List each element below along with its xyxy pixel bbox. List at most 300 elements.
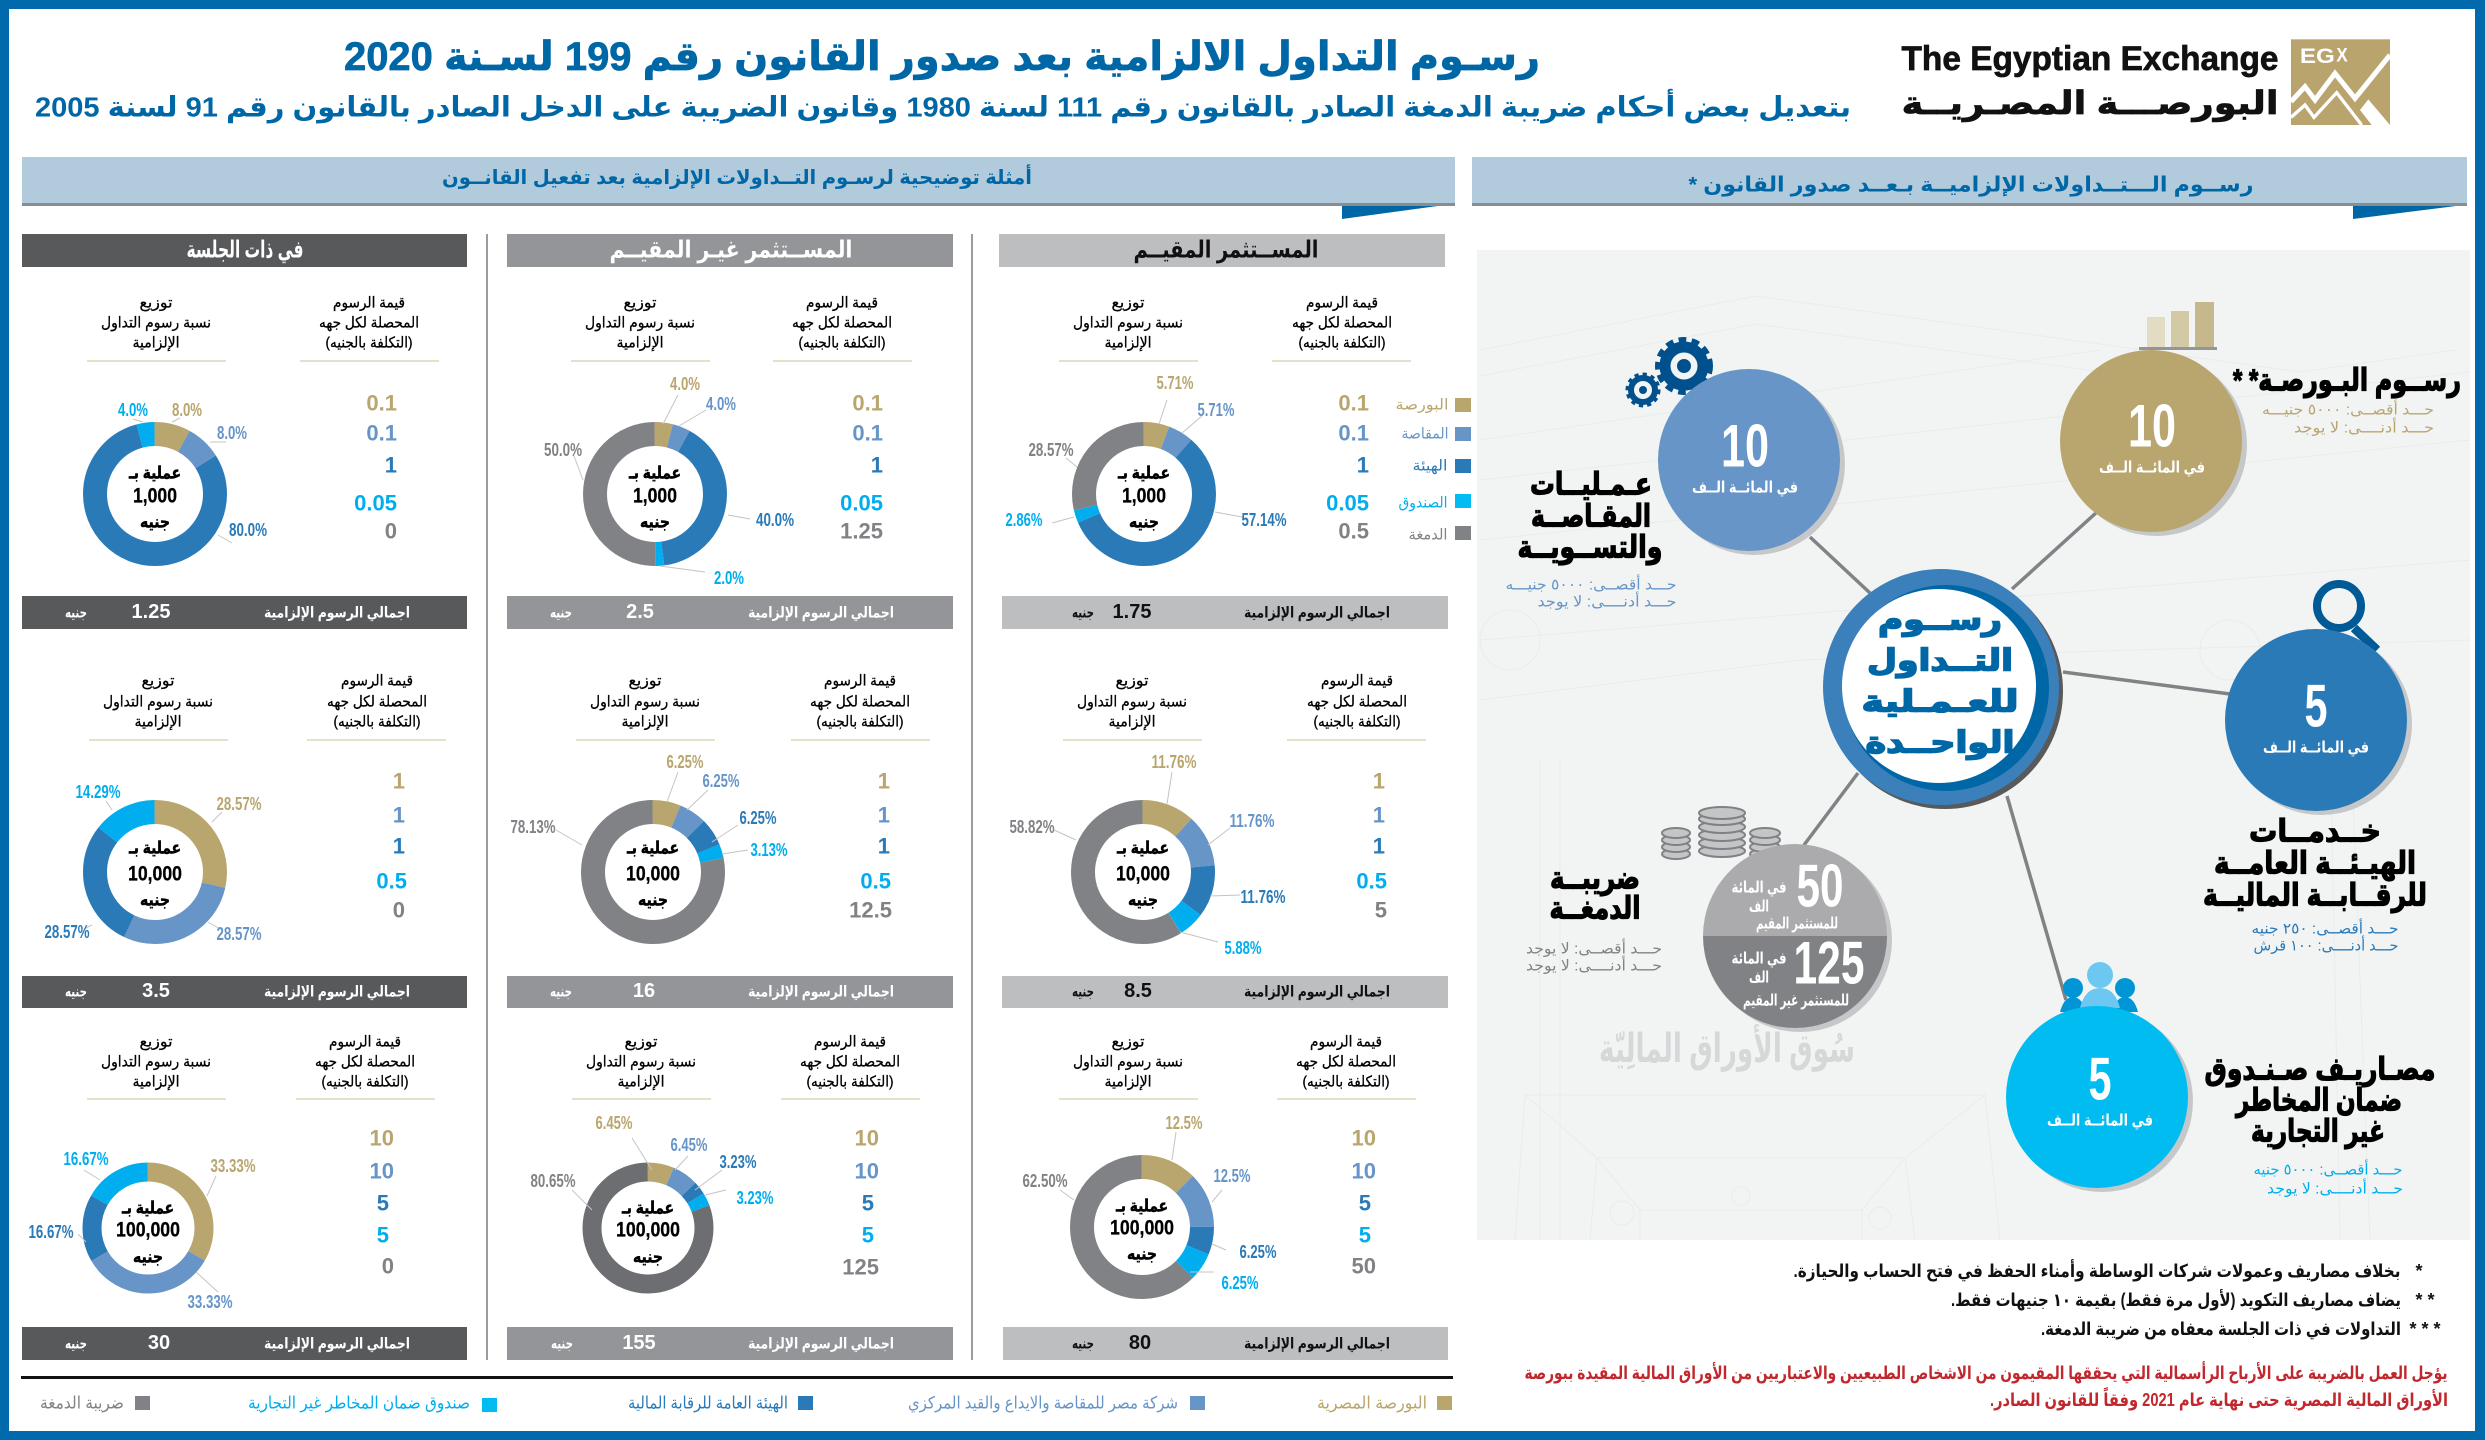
column headers: توزيع [1116, 672, 1148, 690]
donut chart: 2.0% [714, 568, 744, 588]
donut chart: 28.57% [1028, 440, 1074, 460]
total bar: 8.5 [1124, 980, 1152, 1002]
donut chart: 33.33% [210, 1156, 256, 1176]
donut chart: 6.25% [666, 752, 704, 772]
panel: resident 10,000 [1002, 672, 1448, 1008]
values: 10 [1352, 1126, 1376, 1150]
total bar [507, 596, 953, 629]
values: 5 [377, 1222, 389, 1248]
column headers: قيمة الرسوم [814, 1034, 886, 1050]
values: 1.25 [840, 518, 883, 544]
donut chart: 5.71% [1156, 373, 1194, 393]
logo: The Egyptian Exchange: X [2336, 45, 2348, 66]
donut chart: عملية بـ [626, 838, 679, 858]
donut chart: جنيه [133, 1248, 163, 1266]
total bar: اجمالي الرسوم الإلزامية [264, 604, 410, 622]
donut chart: عملية بـ [1116, 838, 1169, 858]
donut chart: عملية بـ [121, 1198, 174, 1218]
values: 1 [878, 834, 890, 858]
values: 1 [1373, 802, 1385, 828]
donut chart [28, 1149, 256, 1312]
column headers: قيمة الرسوم [1306, 294, 1378, 312]
bottom legend: صندوق ضمان المخاطر غير التجارية [248, 1394, 470, 1412]
column headers: (التكلفة بالجنيه) [326, 334, 412, 352]
column headers: الإلزامية [616, 334, 664, 352]
total bar [22, 976, 467, 1008]
circle: exchange fees [2060, 350, 2247, 536]
icon: people [2060, 962, 2138, 1012]
total bar: 16 [633, 980, 655, 1002]
donut chart [544, 374, 794, 588]
section header: examples: أمثلة توضيحية لرسـوم التــداولات الإلزامية بعد تفعيل القانــون [442, 163, 1032, 189]
total bar: جنيه [551, 1336, 573, 1352]
column headers: توزيع [624, 1034, 658, 1050]
panel: resident 100,000 [1003, 1034, 1448, 1360]
circle: risk fund: في المائــة الــف [2047, 1112, 2153, 1130]
footnotes: التداولات في ذات الجلسة معفاه من ضريبة الدمغة. [2041, 1319, 2401, 1340]
circle: clearing [1658, 369, 1845, 555]
column headers: الإلزامية [618, 1074, 664, 1090]
column headers: المحصلة لكل جهه [1296, 1054, 1396, 1070]
donut chart: 11.76% [1152, 752, 1196, 772]
donut chart [1006, 373, 1286, 554]
donut chart: 6.25% [740, 808, 776, 828]
column headers: قيمة الرسوم [333, 294, 405, 312]
donut chart: 12.5% [1166, 1113, 1202, 1133]
legend: fee bodies: المقاصة [1402, 426, 1448, 442]
hub: trading fees per transaction: للعـمـلية [1862, 686, 2018, 718]
circle: stamp duty [1703, 844, 1892, 1032]
column headers: قيمة الرسوم [1310, 1034, 1382, 1050]
legend: fee bodies: الصندوق [1398, 494, 1448, 512]
column headers: توزيع [624, 294, 656, 312]
values: 10 [855, 1126, 879, 1150]
values: 5 [1359, 1190, 1371, 1216]
donut chart: 62.50% [1022, 1171, 1068, 1191]
column headers [572, 1034, 920, 1099]
column headers: (التكلفة بالجنيه) [816, 714, 904, 730]
label: FRA services: حـــد أدنــــى: ١٠٠ قرش [2254, 936, 2398, 954]
panel: fee structure background [1477, 250, 2470, 1240]
donut chart: 16.67% [64, 1149, 108, 1169]
footnotes: * * * [2409, 1319, 2441, 1339]
donut chart [95, 400, 267, 554]
panel: resident column heading: المســتثمر المقيــم [1134, 236, 1318, 264]
label: clearing and settlement: عـمـليــات [1530, 466, 1652, 502]
panel: non-resident 100,000 [507, 1034, 953, 1360]
column headers: المحصلة لكل جهه [1292, 314, 1392, 332]
donut chart: 28.57% [216, 924, 262, 944]
column headers: نسبة رسوم التداول [1073, 1054, 1183, 1070]
column headers: الإلزامية [132, 1074, 180, 1090]
circle: clearing: في المائــة الــف [1692, 480, 1798, 498]
donut chart: عملية بـ [128, 838, 181, 858]
column headers: (التكلفة بالجنيه) [1298, 334, 1386, 352]
label: risk guarantee fund: ضمان المخاطر [2235, 1082, 2402, 1118]
values [840, 390, 883, 544]
panel: non-resident 10,000 [507, 672, 953, 1008]
donut chart: 3.13% [750, 840, 788, 860]
values: 1 [1373, 768, 1385, 794]
label: stamp duty: حـــد أقصــى: لا يوجد [1526, 938, 1662, 958]
column headers [1059, 294, 1411, 361]
values [370, 1126, 394, 1278]
donut chart: جنيه [140, 890, 170, 910]
panel: resident column heading [999, 234, 1445, 267]
donut chart: 1,000 [633, 484, 677, 508]
values: 50 [1352, 1254, 1376, 1278]
column headers: نسبة رسوم التداول [1073, 314, 1183, 332]
total bar: 1.75 [1113, 601, 1151, 623]
column headers: نسبة رسوم التداول [585, 314, 695, 332]
donut chart: جنيه [1128, 890, 1158, 910]
circle: stamp duty: 125 [1794, 930, 1864, 996]
panel: same-session column heading: في ذات الجلسة [186, 236, 304, 264]
label: exchange fees [2233, 362, 2461, 436]
connector lines [1804, 512, 2230, 1000]
values: 10 [370, 1126, 394, 1150]
logo: The Egyptian Exchange: EG [2300, 44, 2335, 68]
column headers: الإلزامية [1104, 334, 1152, 352]
donut chart [1022, 1113, 1276, 1293]
column headers: نسبة رسوم التداول [590, 694, 700, 710]
hub: trading fees per transaction: رســوم [1878, 604, 2002, 638]
values: 0.1 [366, 420, 397, 446]
bottom legend: البورصة المصرية [1317, 1394, 1427, 1412]
donut chart: 100,000 [1110, 1216, 1174, 1240]
donut chart: 6.25% [702, 771, 740, 791]
donut chart: 4.0% [118, 400, 148, 420]
legend: fee bodies: الدمغة [1408, 526, 1448, 544]
column headers: نسبة رسوم التداول [101, 314, 211, 332]
values: 5 [862, 1222, 874, 1248]
donut chart: 4.0% [706, 394, 736, 414]
label: exchange fees: حـــد أدنــــى: لا يوجد [2294, 418, 2434, 436]
donut chart: 1,000 [133, 484, 177, 508]
bottom legend [40, 1394, 1452, 1414]
column headers: نسبة رسوم التداول [103, 694, 213, 710]
label: stamp duty: حـــد أدنــــى: لا يوجد [1526, 956, 1662, 974]
label: clearing and settlement [1506, 466, 1676, 610]
values: 0 [393, 898, 405, 922]
circle: stamp duty: الف [1749, 970, 1769, 986]
column headers: توزيع [140, 294, 172, 312]
donut chart: 16.67% [28, 1222, 74, 1242]
total bar: 2.5 [626, 601, 654, 623]
total bar: جنيه [550, 604, 572, 622]
circle: FRA services [2225, 629, 2412, 815]
circle: stamp duty: 50 [1796, 852, 1844, 920]
values: 5 [377, 1190, 389, 1216]
column headers [87, 1034, 435, 1099]
values: 0.1 [366, 390, 397, 416]
values: 1 [871, 452, 883, 478]
values [849, 768, 892, 922]
label: exchange fees: حـــد أقصــى: ٥٠٠٠ جنيـــه [2262, 400, 2434, 418]
section header: fees [1472, 157, 2467, 219]
total bar [22, 1327, 467, 1360]
circle: stamp duty: للمستثمر غير المقيم [1743, 992, 1849, 1010]
total bar: اجمالي الرسوم الإلزامية [1244, 1336, 1390, 1352]
icon: coins [1662, 807, 1780, 859]
donut chart: 28.57% [216, 794, 262, 814]
values: 1 [393, 802, 405, 828]
donut chart: عملية بـ [128, 464, 181, 482]
donut chart: 28.57% [44, 922, 90, 942]
donut chart: عملية بـ [1117, 464, 1170, 482]
values: 0.1 [1338, 390, 1369, 416]
values: 1 [878, 802, 890, 828]
column headers: المحصلة لكل جهه [810, 694, 910, 710]
panel: same-session column heading [22, 234, 467, 267]
label: stamp duty: الدمغــة [1550, 890, 1640, 926]
circle: exchange fees: 10 [2128, 392, 2176, 460]
column headers [1059, 1034, 1416, 1099]
bottom legend: شركة مصر للمقاصة والايداع والقيد المركزي [908, 1394, 1178, 1414]
footnotes [1794, 1259, 2441, 1340]
column headers [89, 672, 446, 740]
column headers [571, 294, 912, 361]
total bar [1003, 1327, 1448, 1360]
values [354, 390, 397, 544]
circle: stamp duty: في المائة [1732, 880, 1786, 898]
donut chart: عملية بـ [621, 1198, 674, 1218]
label: stamp duty [1526, 860, 1662, 974]
total bar: جنيه [1072, 604, 1094, 622]
values: 1 [1373, 834, 1385, 858]
legend: fee bodies: البورصة [1396, 396, 1448, 414]
total bar: 80 [1129, 1332, 1151, 1354]
values: 10 [370, 1158, 394, 1184]
subtitle: بتعديل بعض أحكام ضريبة الدمغة الصادر بالقانون رقم 111 لسنة 1980 وقانون الضريبة على الدخل الصادر بالقانون رقم 91 لسنة 2005 [35, 88, 1851, 124]
donut chart: 3.23% [720, 1152, 756, 1172]
label: clearing and settlement: حـــد أدنــــى: لا يوجد [1538, 592, 1676, 610]
donut chart: 6.45% [670, 1135, 708, 1155]
circle: stamp duty: الف [1749, 898, 1769, 916]
panel: same session 10,000 [22, 672, 467, 1008]
column headers: (التكلفة بالجنيه) [334, 714, 420, 730]
footnotes: يضاف مصاريف التكويد (لأول مرة فقط) بقيمة ١٠ جنيهات فقط. [1951, 1289, 2401, 1311]
donut chart: 80.65% [530, 1171, 576, 1191]
donut chart: 6.25% [1240, 1242, 1276, 1262]
column headers: المحصلة لكل جهه [800, 1054, 900, 1070]
donut chart: 80.0% [229, 520, 267, 540]
donut chart: 50.0% [544, 440, 582, 460]
donut chart: 14.29% [76, 782, 120, 802]
donut chart: 8.0% [217, 423, 247, 443]
panel: same session 1,000 [22, 294, 467, 629]
donut chart: عملية بـ [628, 464, 681, 482]
total bar: اجمالي الرسوم الإلزامية [264, 984, 410, 1000]
values: 0.1 [1338, 420, 1369, 446]
values: 0.5 [376, 868, 407, 894]
section header: examples [22, 157, 1455, 219]
column headers: توزيع [140, 1034, 172, 1050]
donut chart: جنيه [638, 890, 668, 910]
total bar: 3.5 [142, 980, 170, 1002]
donut chart [44, 782, 262, 944]
donut chart: 10,000 [128, 862, 182, 886]
column headers: توزيع [142, 672, 174, 690]
values: 0.5 [860, 868, 891, 894]
column headers: المحصلة لكل جهه [327, 694, 427, 710]
column headers: نسبة رسوم التداول [101, 1054, 211, 1070]
total bar [1002, 596, 1448, 629]
values: 0.5 [1356, 868, 1387, 894]
donut chart: 1,000 [1122, 484, 1166, 508]
logo: The Egyptian Exchange: The Egyptian Exchange [1902, 40, 2278, 78]
circle: risk fund [2006, 1006, 2193, 1192]
values: 0.05 [1326, 490, 1369, 516]
donut chart [1010, 752, 1286, 958]
footnotes: * * [2415, 1290, 2435, 1310]
label: risk guarantee fund: حـــد أقصــى: ٥٠٠٠ جنيه [2254, 1160, 2402, 1178]
total bar: اجمالي الرسوم الإلزامية [1244, 984, 1390, 1000]
values: 125 [842, 1254, 879, 1280]
column headers: قيمة الرسوم [806, 294, 878, 312]
column headers: الإلزامية [134, 714, 182, 730]
donut chart: 10,000 [1116, 862, 1170, 886]
values [1356, 768, 1387, 922]
donut chart: 100,000 [116, 1218, 180, 1242]
values: 0.1 [852, 390, 883, 416]
label: FRA services: خــدمــات [2249, 814, 2381, 848]
total bar [507, 1327, 953, 1360]
donut chart: 33.33% [188, 1292, 232, 1312]
watermark: stock market: سُوق الأوراق المالِيّة [1599, 1023, 1855, 1072]
label: clearing and settlement: والتســويــة [1518, 530, 1662, 566]
values: 0.05 [840, 490, 883, 516]
label: clearing and settlement: المقـاصــة [1531, 498, 1651, 534]
column headers: نسبة رسوم التداول [586, 1054, 696, 1070]
footnotes: * [2415, 1261, 2423, 1281]
column headers: قيمة الرسوم [341, 672, 413, 690]
values: 0 [385, 518, 397, 544]
column headers: (التكلفة بالجنيه) [1314, 714, 1400, 730]
donut chart [510, 752, 788, 932]
total bar: اجمالي الرسوم الإلزامية [748, 604, 894, 622]
hub: trading fees per transaction: التــداول [1867, 644, 2013, 678]
total bar: اجمالي الرسوم الإلزامية [748, 984, 894, 1000]
donut chart: 100,000 [616, 1218, 680, 1242]
donut chart [530, 1113, 774, 1284]
donut chart: 58.82% [1010, 817, 1054, 837]
donut chart: 57.14% [1242, 510, 1286, 530]
circle: stamp duty: في المائة [1732, 950, 1786, 968]
label: FRA services [2203, 814, 2427, 954]
total bar: اجمالي الرسوم الإلزامية [1244, 604, 1390, 622]
label: stamp duty: ضريبــة [1550, 860, 1640, 896]
circle: clearing: 10 [1721, 412, 1769, 480]
total bar [22, 596, 467, 629]
values: 1 [393, 834, 405, 858]
circle: stamp duty: للمستثمر المقيم [1756, 916, 1838, 932]
icon: gears [1628, 342, 1708, 405]
column headers: نسبة رسوم التداول [1077, 694, 1187, 710]
values: 0 [382, 1254, 394, 1278]
panel: same session 100,000 [22, 1034, 467, 1360]
total bar: 30 [148, 1332, 170, 1354]
donut chart: 6.45% [596, 1113, 632, 1133]
column headers: (التكلفة بالجنيه) [806, 1074, 894, 1090]
total bar: اجمالي الرسوم الإلزامية [748, 1336, 894, 1352]
column headers: توزيع [1112, 294, 1144, 312]
total bar: جنيه [65, 1336, 87, 1352]
values: 1 [1357, 452, 1369, 478]
column headers: (التكلفة بالجنيه) [322, 1074, 408, 1090]
donut chart: 2.86% [1006, 510, 1042, 530]
circle: FRA services: 5 [2304, 672, 2328, 740]
label: risk guarantee fund: غير التجارية [2251, 1114, 2385, 1150]
panel: non-resident column heading [507, 234, 953, 267]
column headers: الإلزامية [132, 334, 180, 352]
column headers: توزيع [1112, 1034, 1144, 1050]
circle: risk fund: 5 [2088, 1046, 2112, 1112]
column headers: المحصلة لكل جهه [319, 314, 419, 332]
column headers: المحصلة لكل جهه [1307, 694, 1407, 710]
column headers: الإلزامية [622, 714, 668, 730]
values: 10 [1352, 1158, 1376, 1184]
panel: non-resident column heading: المســتثمر غيـر المقيــم [610, 236, 852, 264]
hub: trading fees per transaction [1823, 569, 2063, 809]
values [1326, 390, 1369, 544]
values: 0.05 [354, 490, 397, 516]
bottom legend: الهيئة العامة للرقابة المالية [628, 1394, 788, 1414]
total bar: اجمالي الرسوم الإلزامية [264, 1336, 410, 1352]
values: 10 [855, 1158, 879, 1184]
legend: fee bodies: الهيئة [1412, 458, 1448, 474]
label: FRA services: للرقــابــة الماليــة [2203, 878, 2427, 914]
donut chart: 12.5% [1214, 1166, 1250, 1186]
donut chart: 11.76% [1240, 887, 1286, 907]
column headers [576, 672, 930, 740]
icon: magnifier [2317, 584, 2377, 650]
total bar: 155 [622, 1332, 656, 1354]
donut chart: 5.88% [1224, 938, 1262, 958]
donut chart: 11.76% [1230, 811, 1274, 831]
donut chart: عملية بـ [1115, 1196, 1168, 1216]
total bar: جنيه [1072, 984, 1094, 1000]
values [1352, 1126, 1376, 1278]
label: FRA services: حـــد أقصــى: ٢٥٠ جنيه [2251, 918, 2398, 938]
values [376, 768, 407, 922]
label: risk guarantee fund [2204, 1052, 2436, 1198]
values [842, 1126, 879, 1280]
values: 0.5 [1338, 518, 1369, 544]
values: 12.5 [849, 898, 892, 922]
donut chart: جنيه [1129, 512, 1159, 532]
circle: exchange fees: في المائــة الــف [2099, 460, 2205, 478]
values: 5 [1359, 1222, 1371, 1248]
total bar: جنيه [65, 984, 87, 1000]
column headers: قيمة الرسوم [824, 672, 896, 690]
total bar [1002, 976, 1448, 1008]
column headers: المحصلة لكل جهه [792, 314, 892, 332]
total bar: جنيه [65, 604, 87, 622]
donut chart: جنيه [633, 1248, 663, 1266]
column headers: توزيع [628, 672, 662, 690]
donut chart: جنيه [140, 512, 170, 532]
icon: bar chart [2139, 302, 2217, 350]
legend: fee bodies [1396, 396, 1471, 544]
column headers: (التكلفة بالجنيه) [798, 334, 886, 352]
column headers: قيمة الرسوم [329, 1034, 401, 1050]
donut chart: 78.13% [510, 817, 556, 837]
column headers [87, 294, 439, 361]
section header: fees: رســوم الـــتــداولات الإلزاميــة بـعــد صدور القانون * [1688, 174, 2254, 196]
column headers: قيمة الرسوم [1321, 672, 1393, 690]
panel: non-resident 1,000 [507, 294, 953, 629]
